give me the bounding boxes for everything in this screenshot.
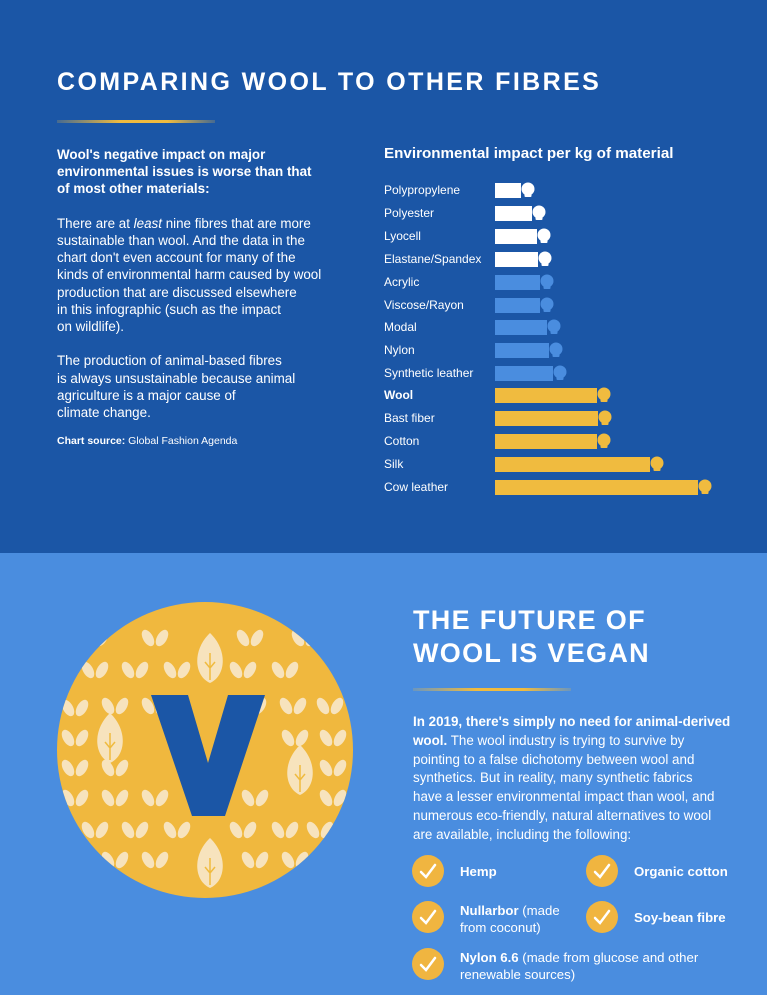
text block: vegan intro: are available, including the following: <box>413 827 631 842</box>
text block: intro <box>57 147 321 420</box>
text block: intro: of most other materials: <box>57 181 210 196</box>
text: Lyocell <box>384 229 421 243</box>
list: alternatives: Soy-bean fibre <box>634 910 726 925</box>
text: Modal <box>384 320 417 334</box>
text: Elastane/Spandex <box>384 252 481 266</box>
letter V <box>151 695 265 816</box>
list: alternatives: renewable sources) <box>460 967 575 982</box>
title underline <box>57 120 215 123</box>
text: Silk <box>384 457 403 471</box>
text block: intro: agriculture is a major cause of <box>57 388 236 403</box>
title: future of wool is vegan: WOOL IS VEGAN <box>413 638 650 668</box>
text block: intro: The production of animal-based fibres <box>57 353 282 368</box>
list: alternatives <box>412 855 728 982</box>
title underline <box>413 688 571 691</box>
text: Polyester <box>384 206 434 220</box>
text block: intro: is always unsustainable because animal <box>57 371 295 386</box>
text: Acrylic <box>384 275 419 289</box>
item: nullarbor <box>412 901 444 933</box>
text block: intro: Wool's negative impact on major <box>57 147 265 162</box>
text: Cotton <box>384 434 419 448</box>
text block: intro: sustainable than wool. And the data in the <box>57 233 305 248</box>
list: alternatives: Nylon 6.6 (made from glucose and other <box>460 950 698 965</box>
chart source: Chart source: Global Fashion Agenda <box>57 435 237 447</box>
text block: intro: chart don't even account for many of the <box>57 250 296 265</box>
text block: intro: environmental issues is worse than that <box>57 164 312 179</box>
text block: vegan intro: pointing to a false dichotomy between wool and <box>413 752 694 767</box>
text block: vegan intro: wool. The wool industry is trying to survive by <box>413 733 684 748</box>
title: future of wool is vegan <box>413 605 650 668</box>
text block: intro: on wildlife). <box>57 319 124 334</box>
text block: vegan intro: have a lesser environmental impact than wool, and <box>413 789 714 804</box>
text block: vegan intro <box>413 714 730 842</box>
item: hemp <box>412 855 444 887</box>
text block: intro: kinds of environmental harm caused by wool <box>57 267 321 282</box>
item: soy-bean <box>586 901 618 933</box>
title: future of wool is vegan: THE FUTURE OF <box>413 605 646 635</box>
list: alternatives: Organic cotton <box>634 864 728 879</box>
text block: intro: There are at least nine fibres that are more <box>57 216 311 231</box>
text block: vegan intro: In 2019, there's simply no need for animal-derived <box>413 714 730 729</box>
text: Polypropylene <box>384 183 460 197</box>
list: alternatives: from coconut) <box>460 920 541 935</box>
text block: intro: climate change. <box>57 405 151 420</box>
icons: skulls <box>522 182 712 494</box>
text: Wool <box>384 388 413 402</box>
item: organic cotton <box>586 855 618 887</box>
item: nylon 6.6 <box>412 948 444 980</box>
list: alternatives: Hemp <box>460 864 497 879</box>
text: Bast fiber <box>384 411 435 425</box>
text block: vegan intro: numerous eco-friendly, natural alternatives to wool <box>413 808 711 823</box>
text: Synthetic leather <box>384 366 473 380</box>
text block: vegan intro: synthetics. But in reality, many synthetic fabrics <box>413 770 693 785</box>
text: Nylon <box>384 343 415 357</box>
chart title: Environmental impact per kg of material <box>384 145 673 162</box>
text: Cow leather <box>384 480 448 494</box>
text block: intro: production that are discussed elsewhere <box>57 285 297 300</box>
title: comparing wool: COMPARING WOOL TO OTHER FIBRES <box>57 68 601 96</box>
icon: vegan badge <box>57 602 353 898</box>
list: alternatives: Nullarbor (made <box>460 903 560 918</box>
text block: intro: in this infographic (such as the impact <box>57 302 281 317</box>
text: Viscose/Rayon <box>384 298 464 312</box>
